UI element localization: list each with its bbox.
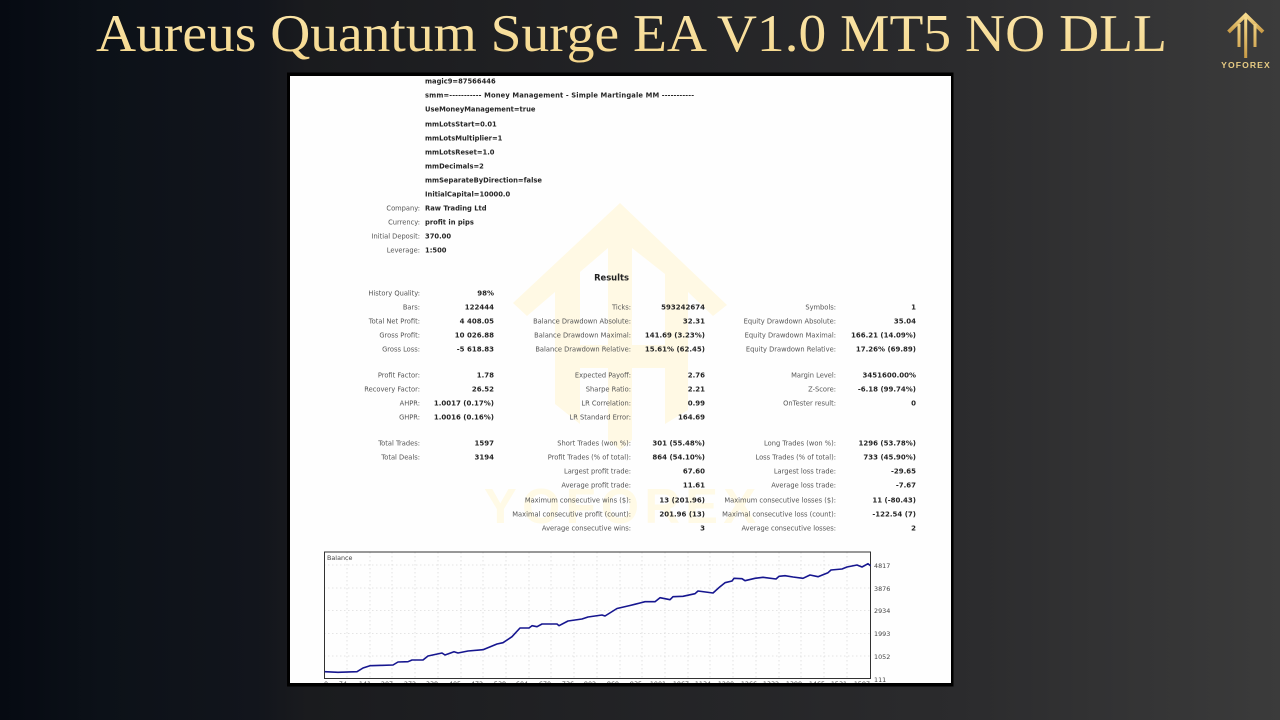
results column 2: 2.21 [688, 386, 705, 394]
results column 3: 166.21 (14.09%) [851, 332, 916, 340]
results column 2: 141.69 (3.23%) [645, 332, 705, 340]
results column 1: 1597 [475, 440, 494, 448]
chart y axis labels: 3876 [874, 585, 890, 593]
results column 3: 11 (-80.43) [872, 496, 916, 504]
results column 2: Largest profit trade: [564, 468, 631, 476]
results column 3: -122.54 (7) [872, 510, 916, 518]
results column 3: -29.65 [891, 468, 916, 476]
chart x axis labels: 0 [324, 680, 328, 688]
results column 2: Balance Drawdown Maximal: [534, 332, 631, 340]
chart x axis labels: 472 [471, 680, 483, 688]
settings list: smm=----------- Money Management - Simple Martingale MM ----------- [425, 92, 694, 100]
chart x axis labels [324, 682, 870, 683]
chart y axis labels: 4817 [874, 562, 890, 570]
results column 1: Total Net Profit: [368, 318, 420, 326]
results column 3: 733 (45.90%) [863, 454, 916, 462]
results column 1: -5 618.83 [457, 346, 494, 354]
settings list: InitialCapital=10000.0 [425, 190, 510, 198]
results column 1: Total Deals: [380, 454, 420, 462]
results column 1: History Quality: [368, 290, 420, 298]
results column 2: 3 [700, 524, 705, 532]
results column 2: 11.61 [683, 482, 705, 490]
results column 1: 1.78 [477, 372, 494, 380]
results column 3: Maximal consecutive loss (count): [722, 510, 836, 518]
chart x axis labels: 538 [494, 680, 506, 688]
results column 2 [512, 304, 705, 532]
chart y axis labels: 1052 [874, 653, 890, 661]
results column 2: Ticks: [611, 304, 631, 312]
settings list: mmLotsReset=1.0 [425, 148, 495, 156]
chart y axis labels [874, 562, 890, 684]
chart x axis labels: 338 [426, 680, 438, 688]
results column 2: LR Standard Error: [570, 414, 631, 422]
results column 2: Short Trades (won %): [557, 440, 631, 448]
results column 3: Long Trades (won %): [764, 440, 836, 448]
results column 2: 13 (201.96) [659, 496, 705, 504]
watermark: YOFOREX logo [484, 203, 756, 534]
icon: gold house with H [1228, 15, 1263, 58]
chart: balance line [324, 552, 890, 688]
settings list: UseMoneyManagement=true [425, 106, 536, 114]
chart title: Balance [327, 554, 353, 562]
chart y axis labels: 2934 [874, 607, 890, 615]
results column 2: 301 (55.48%) [652, 440, 705, 448]
results column 2: 67.60 [683, 468, 705, 476]
results column 1: 122444 [465, 304, 494, 312]
results column 2: Average consecutive wins: [542, 524, 631, 532]
results column 1: 26.52 [472, 386, 494, 394]
chart x axis labels: 74 [339, 680, 347, 688]
settings list: mmSeparateByDirection=false [425, 176, 542, 184]
account details [372, 204, 487, 254]
results column 1: 1.0016 (0.16%) [434, 414, 494, 422]
chart x axis labels: 1266 [741, 680, 757, 688]
panel: strategy tester report [287, 72, 954, 688]
results column 1: 4 408.05 [460, 318, 494, 326]
results column 2: 201.96 (13) [659, 510, 705, 518]
panel frame [287, 72, 954, 686]
results column 2: Sharpe Ratio: [586, 386, 631, 394]
account details: Currency: [388, 218, 420, 226]
account details: profit in pips [425, 218, 474, 226]
results column 1 [364, 290, 494, 462]
results column 2: Balance Drawdown Absolute: [533, 318, 631, 326]
results column 3: 1 [911, 304, 916, 312]
balance line [325, 564, 870, 672]
account details: Leverage: [387, 246, 420, 254]
chart x axis labels: 736 [562, 680, 574, 688]
results column 2: Profit Trades (% of total): [548, 454, 631, 462]
results column 3: Average consecutive losses: [741, 524, 836, 532]
chart x axis labels: 604 [516, 680, 528, 688]
chart x axis labels: 1465 [809, 680, 825, 688]
results column 2: LR Correlation: [581, 400, 631, 408]
results column 3: Equity Drawdown Maximal: [745, 332, 836, 340]
results column 3: Maximum consecutive losses ($): [724, 496, 836, 504]
results column 3: 2 [911, 524, 916, 532]
results column 3: 1296 (53.78%) [859, 440, 916, 448]
results heading: Results [594, 272, 629, 282]
chart x axis labels: 1001 [650, 680, 666, 688]
settings list [425, 78, 694, 198]
account details: Initial Deposit: [372, 232, 420, 240]
results column 3: Largest loss trade: [774, 468, 836, 476]
chart x axis labels: 1332 [763, 680, 779, 688]
settings list: mmLotsMultiplier=1 [425, 134, 503, 142]
results column 1: Gross Loss: [382, 346, 420, 354]
results column 2: 0.99 [688, 400, 705, 408]
results column 3: 35.04 [894, 318, 916, 326]
results column 3: 17.26% (69.89) [856, 346, 916, 354]
results column 1: Total Trades: [377, 440, 420, 448]
results column 1: Profit Factor: [378, 372, 420, 380]
chart x axis labels: 1531 [831, 680, 847, 688]
chart x axis labels: 1067 [673, 680, 689, 688]
chart x axis labels: 141 [359, 680, 371, 688]
results column 2: 15.61% (62.45) [645, 346, 705, 354]
results column 2: 864 (54.10%) [652, 454, 705, 462]
chart y axis labels: 1993 [874, 630, 890, 638]
chart x axis labels: 935 [630, 680, 642, 688]
title: Aureus Quantum Surge EA V1.0 MT5 NO DLL [96, 5, 1167, 63]
settings list: mmDecimals=2 [425, 162, 484, 170]
chart x axis labels: 405 [449, 680, 461, 688]
results column 1: 3194 [475, 454, 494, 462]
results column 1: Recovery Factor: [364, 386, 420, 394]
settings list: magic9=87566446 [425, 78, 496, 86]
chart x axis labels: 670 [539, 680, 551, 688]
results column 3 [722, 304, 916, 532]
chart x axis labels: 1134 [695, 680, 711, 688]
results column 2: Expected Payoff: [575, 372, 631, 380]
results column 1: 1.0017 (0.17%) [434, 400, 494, 408]
chart x axis labels: 802 [584, 680, 596, 688]
account details: 1:500 [425, 246, 447, 254]
account details: Raw Trading Ltd [425, 204, 487, 212]
results column 3: -6.18 (99.74%) [858, 386, 916, 394]
chart x axis labels: 869 [607, 680, 619, 688]
results column 2: 2.76 [688, 372, 705, 380]
chart y axis labels: 111 [874, 676, 886, 684]
chart x axis labels: 1398 [786, 680, 802, 688]
logo: YOFOREX [1221, 15, 1271, 70]
results column 3: 3451600.00% [862, 372, 916, 380]
logo wordmark: YOFOREX [1221, 60, 1271, 70]
results column 1: 10 026.88 [455, 332, 494, 340]
results column 2: Balance Drawdown Relative: [535, 346, 631, 354]
results column 2: Maximum consecutive wins ($): [525, 496, 631, 504]
results column 3: Symbols: [805, 304, 836, 312]
results column 1: AHPR: [400, 400, 420, 408]
account details: Company: [386, 204, 420, 212]
chart x axis labels: 1597 [854, 680, 870, 688]
results column 2: 32.31 [683, 318, 705, 326]
results column 3: Margin Level: [791, 372, 836, 380]
results column 3: Loss Trades (% of total): [755, 454, 836, 462]
results column 3: Equity Drawdown Absolute: [744, 318, 836, 326]
results column 3: -7.67 [896, 482, 916, 490]
results column 2: 164.69 [678, 414, 705, 422]
chart x axis labels: 207 [381, 680, 393, 688]
results column 3: Z-Score: [808, 386, 836, 394]
results column 2: Maximal consecutive profit (count): [512, 510, 631, 518]
results column 3: 0 [911, 400, 916, 408]
results column 3: Average loss trade: [771, 482, 836, 490]
report text [364, 78, 916, 532]
results column 2: 593242674 [661, 304, 705, 312]
account details: 370.00 [425, 232, 451, 240]
results column 1: Gross Profit: [379, 332, 420, 340]
results column 1: 98% [477, 290, 494, 298]
chart x axis labels: 1200 [718, 680, 734, 688]
results column 3: OnTester result: [783, 400, 836, 408]
results column 3: Equity Drawdown Relative: [746, 346, 836, 354]
watermark: YOFOREX logo: YOFOREX [484, 480, 756, 534]
results column 1: GHPR: [399, 414, 420, 422]
results column 1: Bars: [403, 304, 420, 312]
settings list: mmLotsStart=0.01 [425, 120, 497, 128]
results column 2: Average profit trade: [561, 482, 631, 490]
chart x axis labels: 272 [404, 680, 416, 688]
